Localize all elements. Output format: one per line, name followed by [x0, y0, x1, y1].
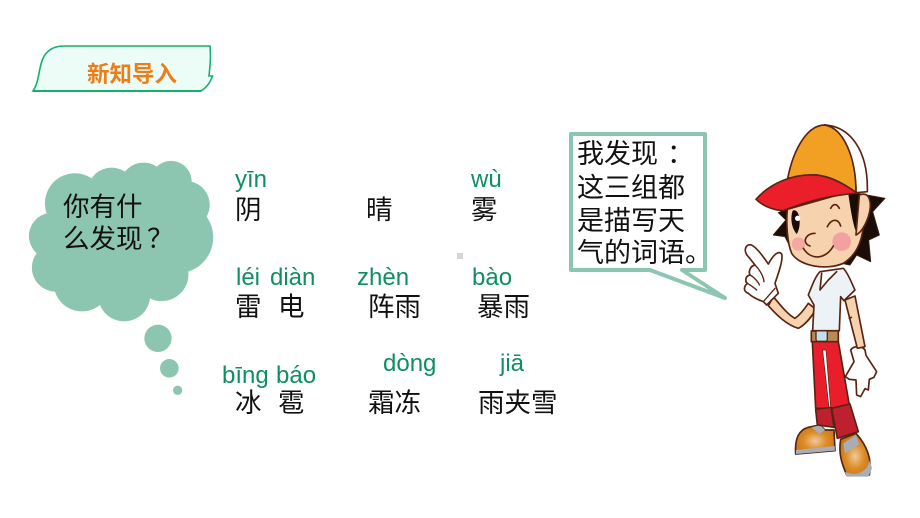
- belt: [811, 331, 838, 342]
- word grid: row 1: wù: [470, 166, 502, 193]
- word grid: row 2: 电: [278, 292, 304, 322]
- cap brim: [756, 175, 857, 211]
- cartoon boy: [744, 125, 885, 477]
- left arm: [768, 297, 816, 328]
- word grid: row 3: dòng: [383, 350, 436, 377]
- speech callout: [571, 134, 725, 298]
- face: [787, 192, 863, 267]
- left shoe: [796, 425, 835, 454]
- word grid: row 3: 冰: [235, 388, 262, 418]
- word grid: row 2: léi: [236, 264, 260, 291]
- callout text: ：: [667, 139, 694, 169]
- cuffs: [816, 404, 858, 438]
- callout text: 我发现: [577, 139, 658, 169]
- word grid: row 2: 雷: [235, 292, 262, 322]
- word grid: row 3: bīng: [222, 362, 269, 389]
- boy lower body: [796, 330, 877, 477]
- word grid: row 1: 雾: [471, 195, 498, 225]
- word grid: row 3: [222, 350, 558, 418]
- callout text: 这三组都: [577, 173, 685, 203]
- callout text: 是描写天: [577, 206, 685, 236]
- word grid: row 3: 雨夹雪: [478, 388, 558, 418]
- section heading tab: [33, 46, 212, 91]
- word grid: row 2: 暴雨: [477, 292, 530, 322]
- bubble text: 你有什: [63, 192, 142, 222]
- word grid: row 2: [235, 264, 530, 322]
- word grid: row 3: 雹: [278, 388, 304, 418]
- cap back: [825, 125, 867, 193]
- bubble text: ？: [147, 224, 174, 254]
- word grid: row 2: zhèn: [357, 264, 409, 291]
- hair lock and ear: [848, 194, 861, 233]
- word grid: row 2: 阵雨: [368, 292, 421, 322]
- section heading tab: 新知导入: [87, 62, 177, 87]
- word grid: row 3: jiā: [499, 350, 525, 377]
- word grid: row 1: [235, 166, 502, 225]
- boy torso and arms: [744, 245, 865, 348]
- word grid: row 3: báo: [276, 362, 316, 389]
- cheeks: [792, 237, 805, 251]
- word grid: row 1: yīn: [235, 166, 267, 193]
- boy head: [756, 125, 885, 267]
- spiky hair: [773, 192, 885, 265]
- shirt: [808, 268, 855, 331]
- word grid: row 2: bào: [472, 264, 512, 291]
- legs: [812, 342, 849, 408]
- word grid: row 1: 阴: [235, 195, 262, 225]
- right hand glove: [845, 347, 877, 397]
- thought bubble: [29, 161, 213, 395]
- cloud shape: [29, 161, 213, 395]
- right shoe: [840, 433, 870, 475]
- wink, brow, nose, smile: [803, 205, 841, 257]
- bubble text: 么发现: [63, 224, 142, 254]
- cap crown: [788, 125, 856, 193]
- word grid: row 3: 霜冻: [368, 388, 421, 418]
- callout text: 气的词语。: [577, 238, 712, 268]
- right arm: [845, 296, 865, 348]
- word grid: row 1: 晴: [366, 195, 392, 225]
- word grid: row 2: diàn: [270, 264, 315, 291]
- eye: [791, 210, 800, 234]
- pointing hand: [744, 245, 782, 305]
